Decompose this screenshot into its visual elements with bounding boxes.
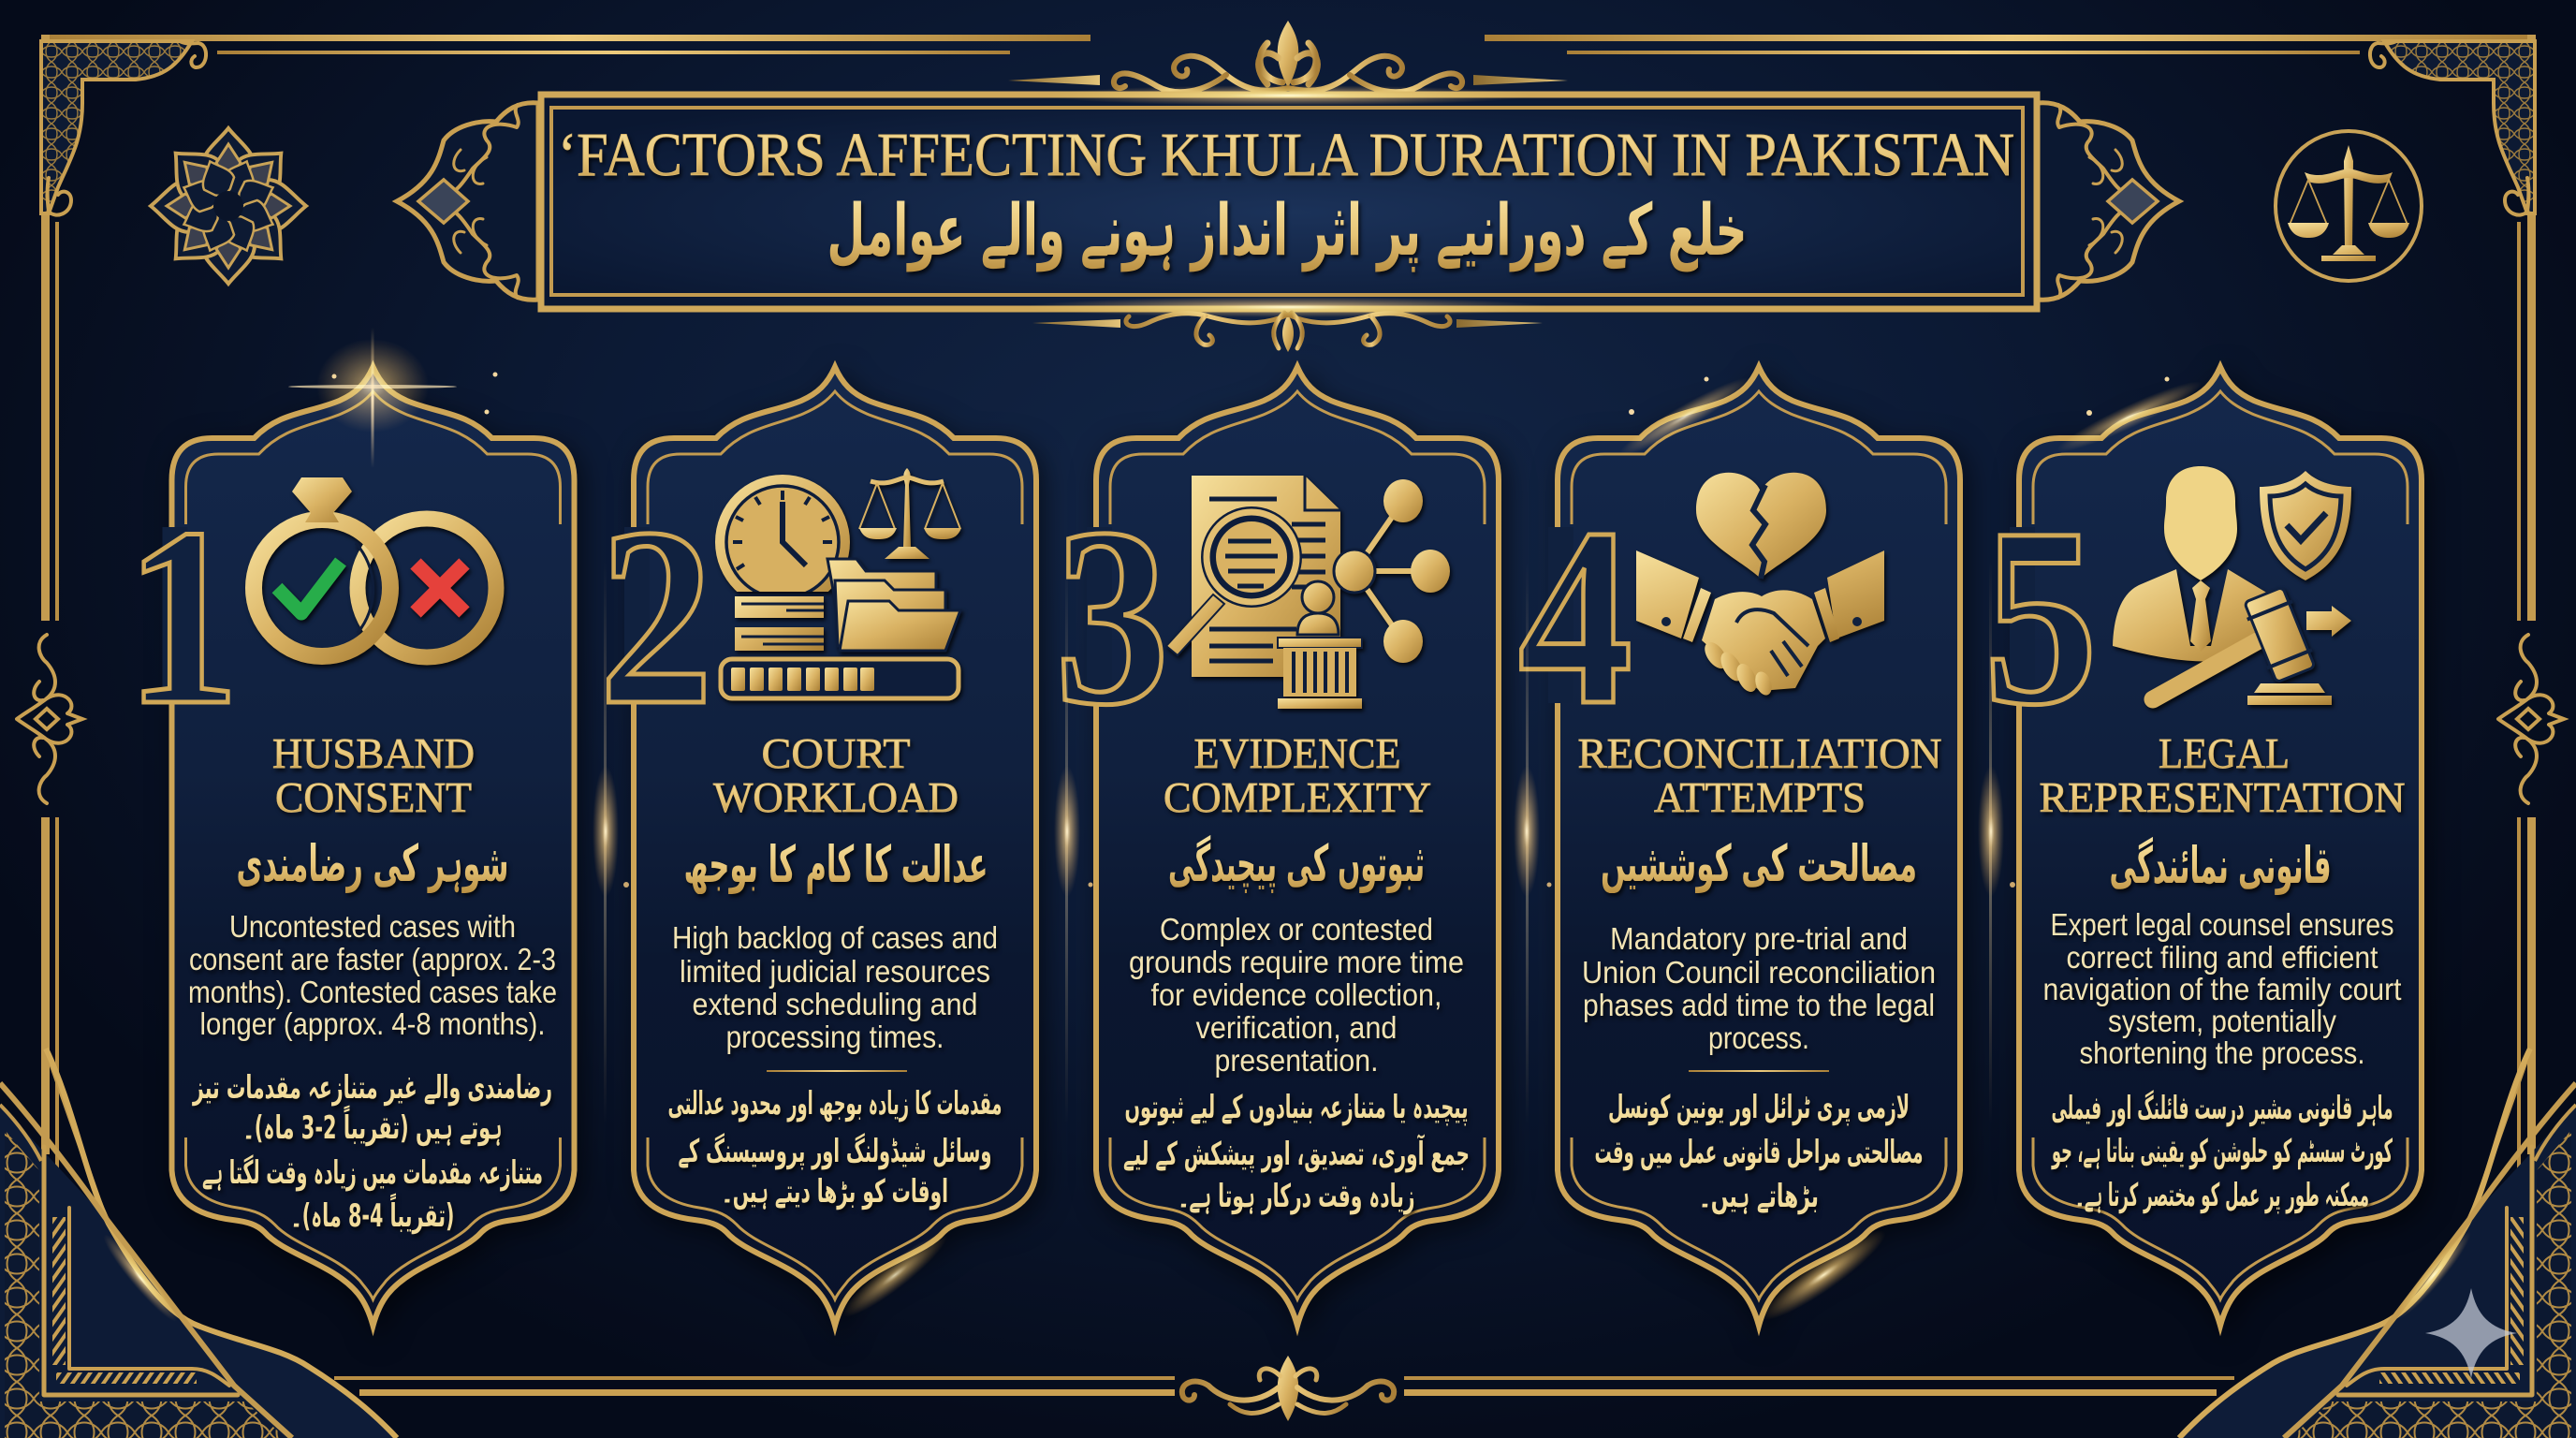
english body: Uncontested cases with	[229, 909, 516, 944]
bottom centre ornament	[1182, 1356, 1394, 1421]
number 4: 4	[1518, 476, 1632, 757]
urdu heading: ثبوتوں کی پیچیدگی	[1168, 834, 1425, 893]
number 1: 1	[125, 476, 240, 757]
panel 4: reconciliation attempts	[1518, 367, 1960, 1326]
number 5: 5	[1983, 476, 2098, 757]
icon: rings with check and cross	[254, 477, 496, 657]
urdu body: زیادہ وقت درکار ہوتا ہے۔	[1178, 1178, 1415, 1215]
title urdu: خلع کے دورانیے پر اثر انداز ہونے والے عوامل	[827, 188, 1747, 272]
urdu body	[2051, 1090, 2393, 1214]
english body	[2042, 907, 2402, 1070]
urdu heading: شوہر کی رضامندی	[236, 834, 509, 893]
heading	[1164, 729, 1431, 821]
english body: system, potentially	[2108, 1004, 2336, 1038]
english body: Complex or contested	[1160, 912, 1433, 946]
heading: RECONCILIATION	[1578, 729, 1941, 777]
urdu body: پیچیدہ یا متنازعہ بنیادوں کے لیے ثبوتوں	[1125, 1089, 1468, 1126]
banner end ornament left	[397, 103, 538, 300]
urdu body: بڑھاتے ہیں۔	[1699, 1178, 1819, 1215]
heading: WORKLOAD	[713, 773, 959, 821]
icon: lawyer, shield, gavel, arrow	[2113, 466, 2351, 705]
english body: limited judicial resources	[680, 954, 990, 989]
english body: phases add time to the legal	[1583, 988, 1935, 1022]
english body: processing times.	[726, 1020, 944, 1054]
panel 2: court workload	[599, 367, 1036, 1326]
watermark star	[2425, 1288, 2517, 1378]
banner frame	[541, 95, 2037, 309]
urdu body: متنازعہ مقدمات میں زیادہ وقت لگتا ہے	[202, 1154, 543, 1192]
glow: banner centre	[1026, 85, 1550, 317]
english body: Union Council reconciliation	[1582, 955, 1936, 990]
urdu body: ہوتے ہیں (تقریباً 2-3 ماہ)۔	[243, 1105, 502, 1147]
english body	[1129, 912, 1464, 1078]
title banner	[397, 95, 2179, 309]
urdu body: مصالحتی مراحل قانونی عمل میں وقت	[1595, 1134, 1923, 1171]
heading: ATTEMPTS	[1654, 773, 1866, 821]
icon: document, magnifier, network, judge podium	[1166, 476, 1450, 709]
urdu body	[668, 1085, 1002, 1211]
urdu heading: مصالحت کی کوششیں	[1601, 834, 1917, 893]
urdu body: (تقریباً 4-8 ماہ)۔	[290, 1193, 455, 1235]
english body: for evidence collection,	[1151, 977, 1442, 1012]
side ornament: left	[17, 635, 82, 803]
urdu body: رضامندی والے غیر متنازعہ مقدمات تیز	[192, 1069, 552, 1107]
english body: shortening the process.	[2080, 1035, 2364, 1070]
corner ornament: top left	[41, 41, 206, 215]
urdu body: وسائل شیڈولنگ اور پروسیسنگ کے	[678, 1133, 992, 1170]
english body: verification, and	[1196, 1010, 1397, 1045]
glows and sparkles	[97, 328, 2477, 1330]
english body	[672, 920, 998, 1054]
number 2: 2	[599, 476, 713, 757]
english body: extend scheduling and	[693, 987, 977, 1021]
heading	[713, 729, 959, 821]
title english: ‘FACTORS AFFECTING KHULA DURATION IN PAKISTAN	[558, 121, 2014, 189]
heading: REPRESENTATION	[2039, 773, 2406, 821]
heading	[1578, 729, 1941, 821]
english body: navigation of the family court	[2042, 972, 2402, 1006]
english body	[1582, 921, 1936, 1055]
urdu body: اوقات کو بڑھا دیتے ہیں۔	[722, 1173, 948, 1211]
english body: consent are faster (approx. 2-3	[189, 942, 556, 976]
heading: EVIDENCE	[1194, 729, 1400, 777]
urdu body: لازمی پری ٹرائل اور یونین کونسل	[1608, 1089, 1910, 1126]
urdu heading: عدالت کا کام کا بوجھ	[683, 835, 988, 894]
banner end ornament right	[2038, 103, 2179, 300]
number 3: 3	[1055, 476, 1169, 757]
heading: CONSENT	[275, 773, 472, 821]
english body: presentation.	[1215, 1043, 1378, 1078]
heading	[2039, 729, 2406, 821]
english body: Mandatory pre-trial and	[1610, 921, 1908, 956]
top centre ornament	[1008, 21, 1568, 92]
english body	[188, 909, 557, 1041]
urdu body	[1595, 1089, 1923, 1215]
english body: Expert legal counsel ensures	[2050, 907, 2394, 942]
corner swoop: bottom left	[0, 1049, 397, 1438]
corner swoop: bottom right	[2179, 1049, 2576, 1438]
english body: process.	[1708, 1020, 1809, 1055]
english body: grounds require more time	[1129, 945, 1464, 979]
banner inner frame	[551, 108, 2023, 295]
urdu body	[192, 1069, 552, 1235]
heading	[272, 729, 475, 821]
urdu body: جمع آوری، تصدیق، اور پیشکش کے لیے	[1123, 1134, 1470, 1173]
side ornament: right	[2498, 635, 2564, 803]
heading: COMPLEXITY	[1164, 773, 1431, 821]
urdu body: مقدمات کا زیادہ بوجھ اور محدود عدالتی	[668, 1085, 1002, 1123]
panel 5: legal representation	[1983, 367, 2422, 1326]
english body: longer (approx. 4-8 months).	[200, 1006, 545, 1041]
bottom of banner ornament	[1032, 313, 1543, 352]
english body: correct filing and efficient	[2067, 940, 2378, 975]
corner ornament: top right	[2370, 41, 2535, 215]
english body: High backlog of cases and	[672, 920, 998, 955]
urdu heading: قانونی نمائندگی	[2110, 836, 2331, 895]
icon: broken heart over handshake	[1636, 473, 1884, 697]
icon: islamic rosette	[151, 128, 306, 284]
icon: scales of justice medallion	[2276, 131, 2422, 281]
english body: months). Contested cases take	[188, 975, 557, 1009]
panel 3: evidence complexity	[1055, 367, 1499, 1326]
heading: HUSBAND	[272, 729, 475, 777]
heading: COURT	[762, 729, 910, 777]
heading: LEGAL	[2159, 729, 2290, 777]
urdu body	[1123, 1089, 1470, 1215]
icon: clock, scales, folders, progress bar	[715, 468, 961, 698]
panel 1: husband consent	[125, 367, 575, 1326]
